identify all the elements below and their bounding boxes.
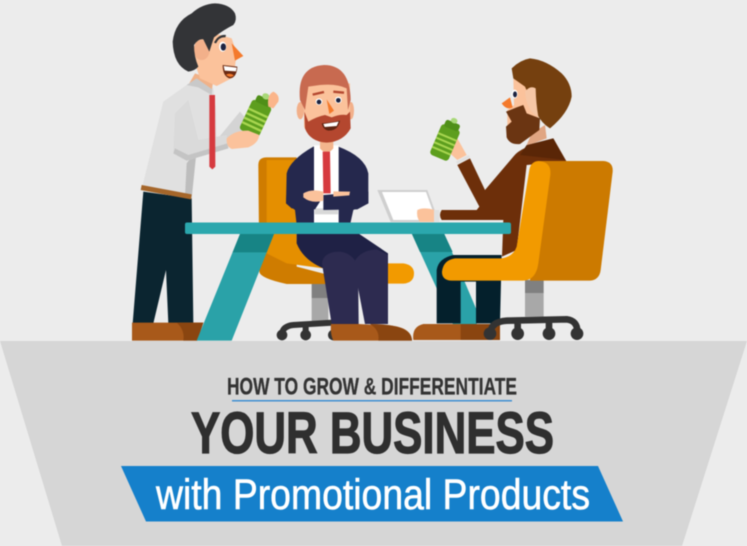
icon: green bottle [429, 114, 464, 162]
illustration: right office chair [442, 161, 613, 340]
icon: green bottle [239, 89, 277, 138]
illustration: laptop [377, 190, 439, 222]
illustration: teal table top [185, 222, 511, 234]
banner: with promotional products: with Promotional Products [155, 471, 590, 519]
illustration: middle office chair [258, 157, 414, 340]
illustration: seated man with crossed arms [286, 65, 412, 341]
illustration: man on right with bottle [413, 58, 572, 340]
panel: grey trapezoid title background [0, 341, 747, 546]
heading: your business: YOUR BUSINESS [191, 401, 554, 466]
heading: how to grow and differentiate: HOW TO GROW & DIFFERENTIATE [227, 374, 517, 400]
text block: title [121, 374, 623, 522]
illustration: standing man with bottle [132, 3, 279, 341]
illustration: teal table legs [197, 233, 477, 341]
